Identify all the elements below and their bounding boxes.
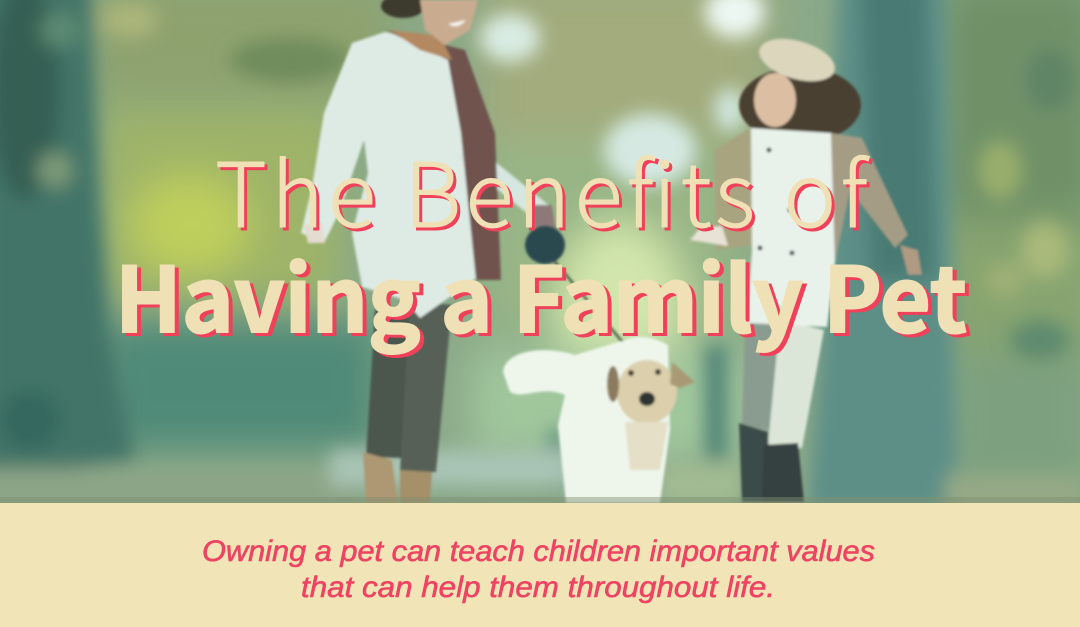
title line 1: The Benefits of: The Benefits of [215,124,869,253]
leash handle and leash [525,226,625,345]
subtitle band [0,503,1080,627]
subtitle text: that can help them throughout life. [301,571,775,604]
subtitle text: Owning a pet can teach children important values [202,535,875,568]
woman [301,0,556,503]
title line 1: The Benefits of: The Benefits of [218,127,872,256]
title line 2: Having a Family Pet: Having a Family Pet [115,228,967,358]
girl [690,31,922,502]
title [115,124,971,361]
title line 2: Having a Family Pet: Having a Family Pet [119,231,971,361]
dog [503,337,695,503]
ground leaves edge [0,497,1080,503]
subtitle text [202,535,875,604]
